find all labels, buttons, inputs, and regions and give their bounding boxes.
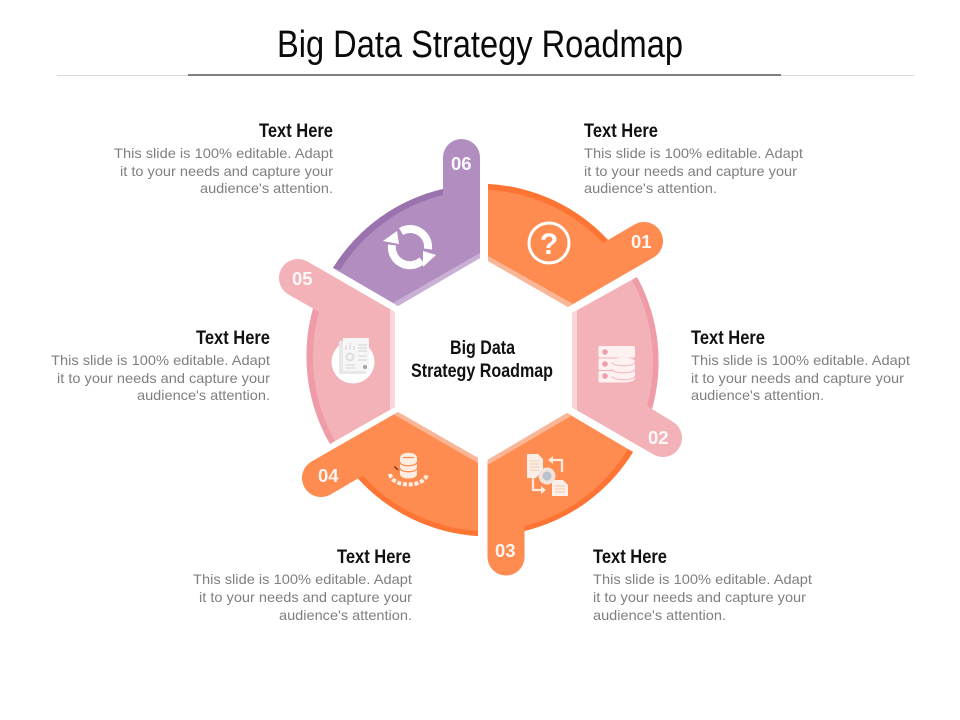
number 04: 04 xyxy=(318,465,339,486)
number 02: 02 xyxy=(648,427,669,448)
text block 02: audience's attention. xyxy=(691,387,824,403)
text block 03: This slide is 100% editable. Adapt xyxy=(593,571,812,587)
segment 02 xyxy=(572,277,682,457)
segment 05 xyxy=(279,259,395,444)
text block 03: audience's attention. xyxy=(593,607,726,623)
text block 01: Text Here xyxy=(584,120,658,142)
text block 06: it to your needs and capture your xyxy=(120,163,333,179)
number 06: 06 xyxy=(451,153,472,174)
icon: question mark xyxy=(529,223,569,263)
center label: Big Data xyxy=(450,337,515,359)
number 03: 03 xyxy=(495,540,516,561)
text block 03: Text Here xyxy=(593,546,667,568)
text block 05: audience's attention. xyxy=(137,387,270,403)
icon: server and database xyxy=(598,346,635,382)
text block 02 xyxy=(691,327,910,403)
text block 02: Text Here xyxy=(691,327,765,349)
text block 05: Text Here xyxy=(196,327,270,349)
text block 02: This slide is 100% editable. Adapt xyxy=(691,352,910,368)
text block 06: audience's attention. xyxy=(200,180,333,196)
segment 04 xyxy=(302,412,478,536)
text block 04: This slide is 100% editable. Adapt xyxy=(193,571,412,587)
icon: documents exchange xyxy=(527,454,568,496)
text block 01: it to your needs and capture your xyxy=(584,163,797,179)
text block 04 xyxy=(193,546,412,623)
text block 06 xyxy=(114,120,333,196)
number 01: 01 xyxy=(631,231,652,252)
icon: refresh arrows xyxy=(383,229,436,267)
text block 01: This slide is 100% editable. Adapt xyxy=(584,145,803,161)
center label xyxy=(411,337,553,382)
segment 01 xyxy=(488,184,663,307)
text block 01 xyxy=(584,120,803,196)
text block 04: it to your needs and capture your xyxy=(199,589,412,605)
center label: Strategy Roadmap xyxy=(411,360,553,382)
text block 05: it to your needs and capture your xyxy=(57,370,270,386)
text block 06: This slide is 100% editable. Adapt xyxy=(114,145,333,161)
icon: report on white circle xyxy=(332,338,374,384)
icon: database with dashed ring xyxy=(390,453,427,484)
segment 06 xyxy=(333,139,480,306)
text block 01: audience's attention. xyxy=(584,180,717,196)
text block 05: This slide is 100% editable. Adapt xyxy=(51,352,270,368)
text block 04: audience's attention. xyxy=(279,607,412,623)
text block 04: Text Here xyxy=(337,546,411,568)
text block 03: it to your needs and capture your xyxy=(593,589,806,605)
text block 03 xyxy=(593,546,812,623)
title: Big Data Strategy Roadmap xyxy=(277,24,683,66)
number 05: 05 xyxy=(292,268,313,289)
segment 03 xyxy=(488,413,633,576)
text block 02: it to your needs and capture your xyxy=(691,370,904,386)
icon: question mark: ? xyxy=(540,228,558,261)
text block 06: Text Here xyxy=(259,120,333,142)
text block 05 xyxy=(51,327,270,403)
